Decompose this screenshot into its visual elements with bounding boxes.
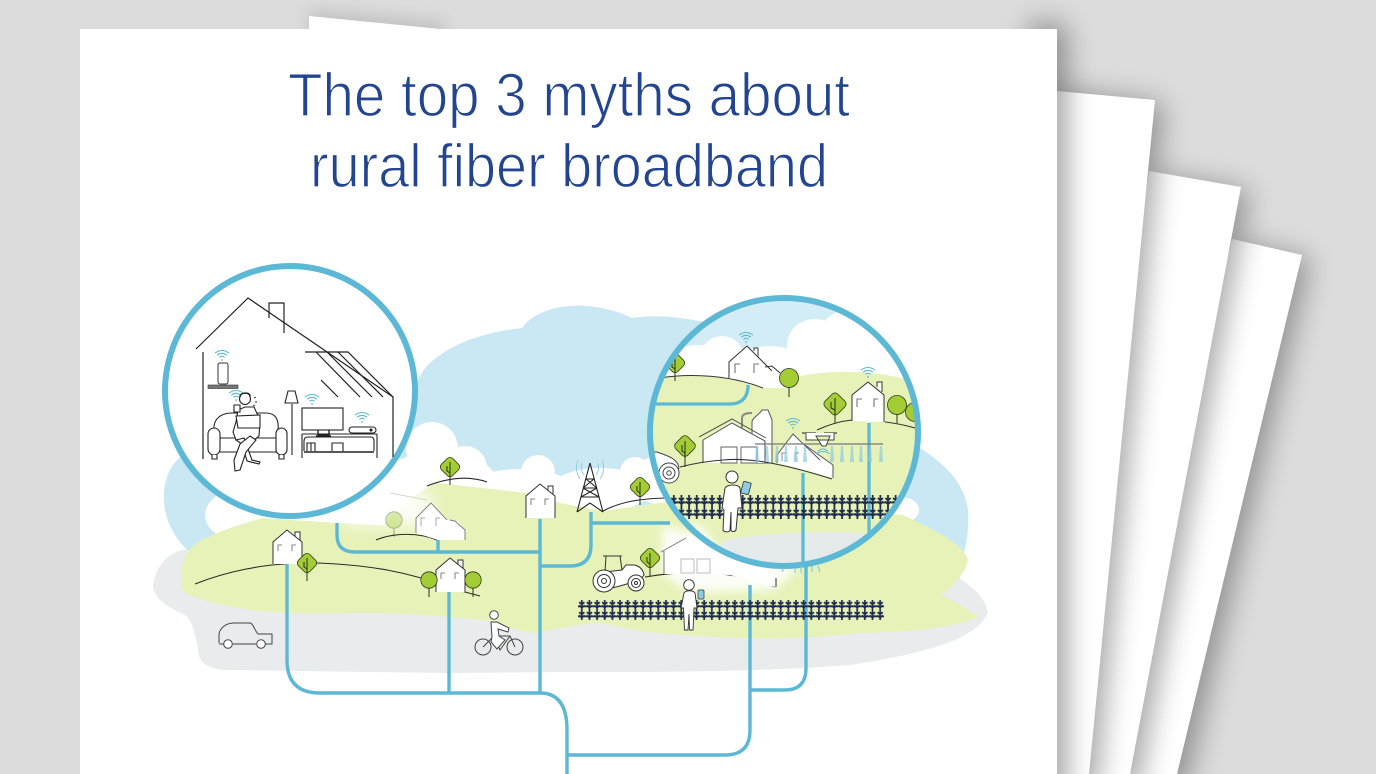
circle: home close-up — [165, 266, 415, 516]
spray fragments below ring — [782, 566, 820, 573]
faded tree — [386, 512, 402, 537]
drone — [802, 433, 837, 454]
wifi icons — [215, 350, 369, 423]
small house on farm hill — [777, 434, 833, 478]
tree near tower — [629, 476, 651, 505]
white fade near farm — [662, 525, 800, 592]
wifi B — [861, 368, 875, 378]
sky inset — [685, 301, 881, 350]
house: lower centre — [436, 558, 465, 592]
tree near tractor — [639, 547, 661, 576]
lower-left white fade — [687, 520, 721, 546]
clouds inset — [665, 312, 904, 380]
farmer — [681, 580, 704, 630]
faded house — [416, 503, 465, 540]
sofa — [208, 413, 287, 459]
farm building — [661, 535, 776, 587]
fiber inset — [640, 385, 869, 570]
green hills — [181, 483, 978, 638]
sheet 4 peeking above the page — [309, 10, 445, 40]
speaker and shelf — [208, 363, 238, 388]
tree: hilltop — [439, 456, 461, 485]
tractor part — [654, 452, 680, 484]
sheet 1 — [1057, 90, 1163, 774]
title — [288, 61, 850, 200]
sheet 3 — [1100, 239, 1310, 774]
tree — [296, 552, 318, 581]
trees right — [824, 392, 915, 423]
title: rural fiber broadband — [310, 132, 828, 200]
house B — [852, 382, 884, 422]
plants row — [578, 600, 884, 620]
farmer inset — [722, 471, 751, 532]
cyclist — [475, 611, 523, 655]
house A — [660, 346, 787, 388]
trees by house — [421, 572, 481, 597]
fiber lines — [287, 512, 806, 774]
wifi A — [739, 332, 753, 343]
sprayer — [755, 444, 883, 462]
back sheets — [309, 10, 1310, 774]
house: left hill — [273, 530, 302, 564]
landscape — [153, 306, 988, 673]
house: near tower — [526, 484, 555, 518]
floor lamp — [285, 391, 298, 455]
ring: farm — [650, 298, 918, 566]
hill B — [817, 420, 915, 430]
tractor — [593, 556, 644, 592]
clouds — [205, 422, 919, 550]
tree: circle — [780, 368, 798, 397]
circle: farm close-up — [640, 290, 930, 573]
car — [219, 623, 272, 648]
title: The top 3 myths about — [288, 61, 850, 129]
house outline — [196, 298, 393, 459]
farm hill — [680, 459, 832, 479]
sheet 2 — [1057, 171, 1249, 774]
hill lines — [195, 478, 775, 596]
gray road inset — [720, 532, 867, 563]
wifi farm — [786, 418, 800, 429]
white fade near hilltop house — [340, 490, 432, 525]
plants inset — [670, 495, 910, 519]
sky — [164, 306, 968, 592]
barn and silo — [699, 410, 772, 463]
main page shadow — [1030, 22, 1066, 774]
solar panel — [305, 352, 393, 397]
tree: farm — [674, 435, 696, 467]
green hill inset — [653, 372, 915, 546]
road band — [153, 550, 988, 673]
tv and cabinet — [302, 408, 377, 458]
hills and houses — [195, 456, 884, 655]
main page — [80, 29, 1057, 774]
tree: diamond left — [669, 354, 686, 381]
cell tower — [576, 460, 604, 512]
person with laptop — [233, 393, 260, 471]
